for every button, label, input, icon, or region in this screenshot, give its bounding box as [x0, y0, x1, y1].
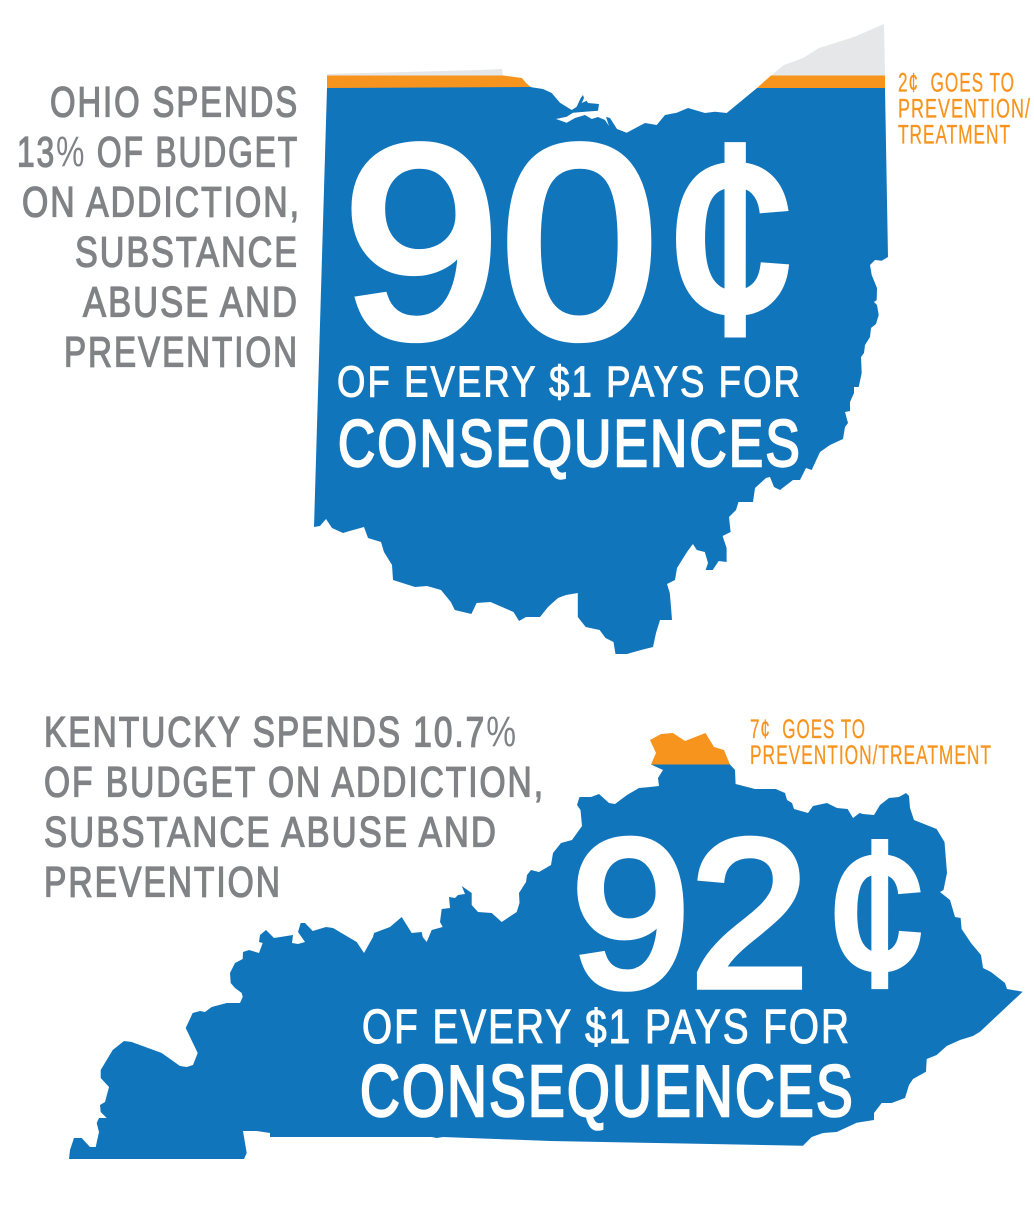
text block: Kentucky budget share: KENTUCKY SPENDS 10.7% [44, 709, 518, 757]
map: grey top of Ohio, left [327, 69, 503, 76]
map: grey top of Ohio, right [771, 24, 885, 76]
Kentucky map [69, 733, 1023, 1159]
big number: 92 cents: ¢ [825, 798, 929, 1027]
caption: consequences: CONSEQUENCES [338, 406, 802, 480]
text block: Ohio budget share [17, 79, 301, 377]
map: blue body of Kentucky [69, 764, 1023, 1159]
map: orange band right [757, 76, 885, 88]
label: 7 cents to prevention [750, 714, 992, 770]
caption: of every dollar: OF EVERY $1 PAYS FOR [337, 358, 802, 407]
text block: Ohio budget share: OHIO SPENDS [50, 79, 299, 127]
big number: 90 cents: ¢ [663, 87, 800, 387]
big number: 92 cents [571, 796, 929, 1031]
label: 2 cents to prevention [898, 68, 1031, 150]
map: orange band left [327, 76, 532, 88]
big number: 90 cents: 90 [342, 90, 658, 396]
caption: consequences: CONSEQUENCES [360, 1052, 855, 1132]
text block: Kentucky budget share [44, 709, 545, 907]
big number: 92 cents: 92 [571, 796, 809, 1031]
text block: Kentucky budget share: OF BUDGET ON ADDICTION, [44, 759, 545, 807]
caption: of every dollar: OF EVERY $1 PAYS FOR [362, 1001, 851, 1054]
big number: 90 cents [342, 87, 800, 396]
text block: Ohio budget share: ABUSE AND [83, 279, 299, 327]
Ohio map [314, 24, 888, 654]
label: 7 cents to prevention: 7¢ GOES TO [750, 714, 866, 744]
panel: Kentucky [44, 709, 1023, 1159]
map: blue body of Ohio [314, 87, 888, 654]
panel: Ohio [17, 24, 1031, 654]
text block: Ohio budget share: SUBSTANCE [75, 229, 299, 277]
text block: Kentucky budget share: SUBSTANCE ABUSE AND [44, 809, 498, 857]
text block: Kentucky budget share: PREVENTION [44, 859, 282, 907]
map: orange top of Kentucky [650, 733, 730, 764]
text block: Ohio budget share: 13% OF BUDGET [17, 129, 299, 177]
text block: Ohio budget share: PREVENTION [64, 329, 299, 377]
text block: Ohio budget share: ON ADDICTION, [22, 179, 301, 227]
